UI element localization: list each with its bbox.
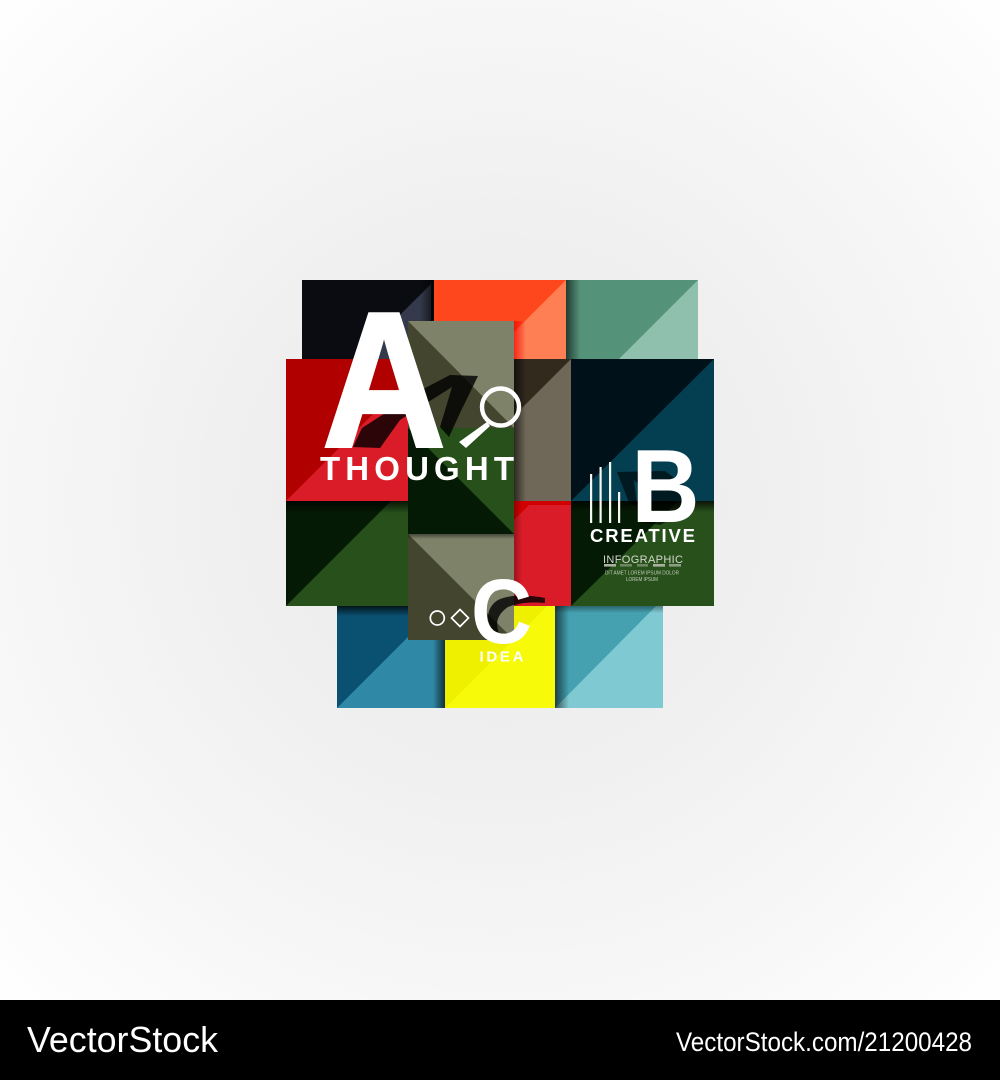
panel: centre column [408,321,514,640]
tile: lower olive [408,534,514,640]
label: CREATIVE: CREATIVE [590,525,695,546]
dash row [604,564,681,567]
tile: brown [514,359,571,501]
panel: bottom row tiles [337,606,663,708]
letter A shadow [353,375,478,448]
icon: diamond [452,610,468,626]
tile: right green [571,501,714,606]
caption line one: DIT AMET LOREM IPSUM DOLOR [605,570,679,576]
icon: circle [430,611,444,625]
heading letter C: C [471,561,532,663]
icon: vertical bars [590,462,620,523]
tile: centre green [408,428,514,534]
tile: teal [566,280,698,359]
label: THOUGHT: THOUGHT [320,450,514,487]
panel: top row tiles [302,280,698,359]
letter B shadow [617,471,690,525]
caption line two: LOREM IPSUM [626,577,658,583]
heading letter B: B [632,429,700,545]
heading letter A: A [322,272,446,488]
footer reference: VectorStock.com/21200428 [676,1027,972,1057]
tile: dark green [286,501,408,606]
footer bar [0,1000,1000,1080]
letter C shadow [488,596,545,636]
tile: black [302,280,434,359]
tile: yellow [445,606,555,708]
tile: cyan [555,606,663,708]
tile: small red [514,501,571,606]
tile: navy [571,359,714,501]
icon: magnifying glass [459,388,519,448]
panel: right tiles [514,359,714,606]
footer brand: VectorStock [27,1019,219,1060]
label: INFOGRAPHIC: INFOGRAPHIC [603,554,683,566]
label: IDEA: IDEA [480,648,524,666]
panel: left red and green tiles [286,359,408,606]
tile: upper olive [408,321,514,428]
tile: blue [337,606,445,708]
tile: red [286,359,408,501]
tile: orange [434,280,566,359]
